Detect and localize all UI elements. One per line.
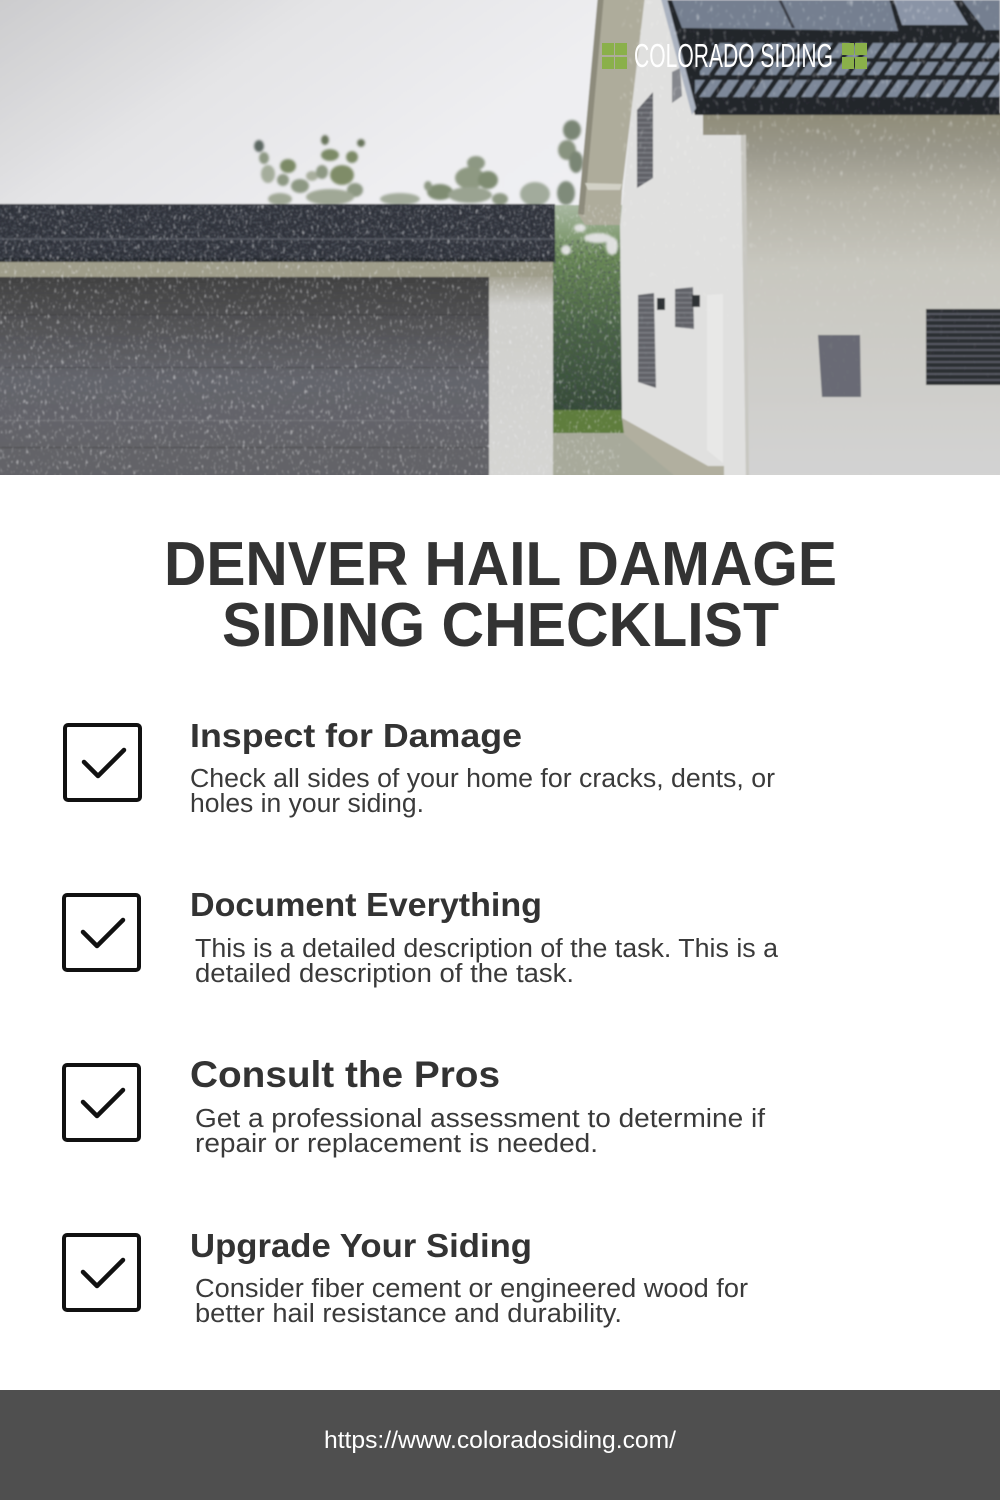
roof base (660, 0, 1000, 115)
grass (552, 410, 624, 434)
garage roof (0, 204, 555, 262)
garage pillar (489, 277, 553, 480)
checklist item 3 (64, 1054, 766, 1158)
checklist item 4 (64, 1227, 749, 1328)
hail on the house (620, 0, 1000, 347)
hedge texture (552, 240, 622, 411)
corner wall shadow (741, 135, 749, 480)
hedge behind the garage (552, 205, 622, 411)
title: SIDING CHECKLIST (222, 591, 779, 660)
description: Consider fiber cement or engineered wood for (195, 1275, 749, 1303)
icon: checkbox (64, 1065, 139, 1140)
walkway (552, 432, 675, 475)
description (195, 1105, 766, 1158)
logo left window icon (602, 43, 627, 69)
heading: Inspect for Damage (190, 717, 522, 754)
description: Get a professional assessment to determine if (195, 1105, 766, 1133)
solar panels (670, 0, 898, 31)
foundation (622, 418, 724, 480)
garage door (0, 277, 489, 480)
front wall barred window (926, 309, 1000, 385)
icon: checkbox (64, 895, 139, 970)
checklist item 1 (65, 717, 776, 818)
footer URL: https://www.coloradosiding.com/ (324, 1427, 676, 1454)
garage roof surface (0, 204, 555, 262)
heading: Consult the Pros (190, 1054, 500, 1095)
checklist item 2 (64, 886, 779, 988)
footer bar (0, 1390, 1000, 1500)
garage door panel lines (0, 314, 489, 448)
house front wall (700, 113, 1000, 480)
side wall upper window (637, 92, 653, 188)
description: better hail resistance and durability. (195, 1300, 622, 1328)
side wall lower window (638, 293, 656, 388)
side wall small top window (672, 68, 682, 103)
gable trim (578, 0, 604, 215)
roof tile rows (695, 43, 1000, 97)
garage fascia (0, 262, 553, 277)
background trees (254, 120, 583, 206)
description: repair or replacement is needed. (195, 1130, 598, 1158)
footer background (0, 1390, 1000, 1500)
description: detailed description of the task. (195, 960, 574, 988)
description (190, 765, 776, 818)
hero photo: house and garage in a hail storm (0, 0, 1000, 480)
blossoms on hedge (561, 224, 618, 255)
roof edge flashing (660, 0, 696, 115)
side wall middle window (675, 287, 694, 329)
icon: checkbox (64, 1235, 139, 1310)
heading: Upgrade Your Siding (190, 1227, 532, 1264)
title (164, 530, 837, 660)
house roof (660, 0, 1000, 115)
icon: checkbox (65, 725, 140, 800)
gable soffit (578, 0, 645, 225)
utility box (818, 335, 861, 397)
description (195, 1275, 749, 1328)
description: Check all sides of your home for cracks, dents, or (190, 765, 776, 793)
wall lamps (657, 295, 700, 310)
description: holes in your siding. (190, 790, 424, 818)
logo: Colorado Siding (602, 37, 867, 74)
hail on garage and hedge (0, 205, 620, 475)
heading: Document Everything (190, 886, 542, 923)
side door recess (708, 296, 722, 316)
title: DENVER HAIL DAMAGE (164, 530, 837, 599)
logo right window icon (842, 43, 867, 69)
roof shingle lines (0, 238, 555, 240)
description (195, 935, 779, 988)
sky (0, 0, 1000, 206)
description: This is a detailed description of the task. This is a (195, 935, 779, 963)
logo wordmark: COLORADO SIDING (634, 37, 833, 74)
house side wall (620, 0, 746, 480)
